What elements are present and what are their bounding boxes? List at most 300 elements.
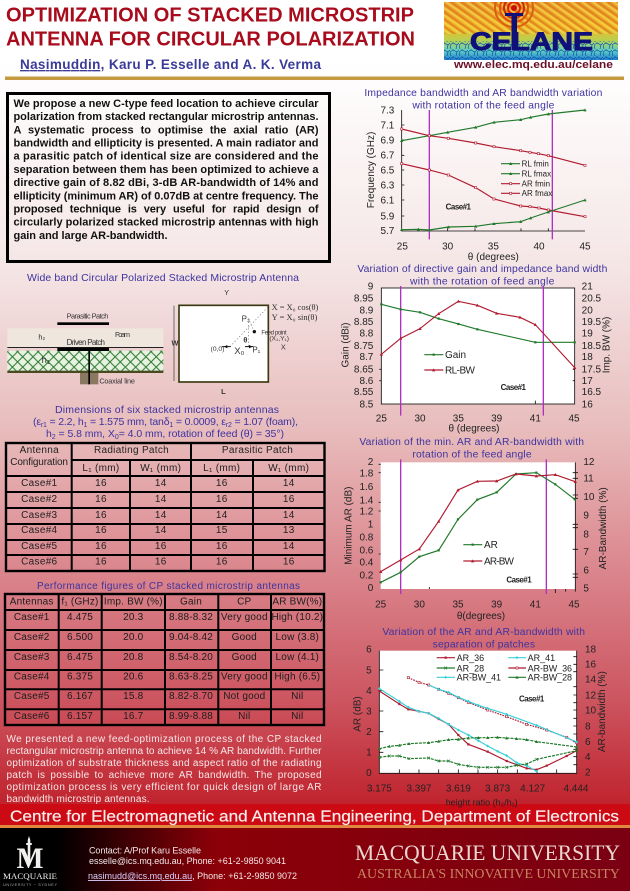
chart 1 plot: 30 (442, 241, 454, 252)
table caption: dimensions (33, 404, 298, 441)
CELANE logo: CELANE (470, 28, 593, 56)
university name (355, 840, 620, 881)
table: antenna dimensions: 14 (155, 494, 167, 505)
chart 2 plot: 20 (582, 305, 593, 316)
chart 2 plot: 39 (491, 414, 503, 425)
chart 2 plot: 25 (376, 414, 387, 425)
chart 2 title (357, 264, 608, 287)
table: antenna dimensions: 14 (216, 510, 228, 521)
table: antenna dimensions: Configuration (10, 457, 68, 468)
table: antenna dimensions: 16 (95, 525, 107, 536)
chart 2 plot: Gain (445, 350, 466, 361)
chart 4 plot: 5 (366, 665, 372, 676)
chart 4 title (382, 627, 585, 650)
chart 4 plot: 0 (366, 768, 372, 779)
diagram: stacked patch cross-section: h₁ (42, 355, 50, 365)
chart 3 plot: 0.8 (359, 533, 374, 544)
university name: MACQUARIE UNIVERSITY (355, 840, 620, 865)
chart 4 plot: 4.444 (563, 783, 589, 794)
diagram: patch top view: X (281, 342, 286, 351)
footer band (0, 828, 630, 891)
chart 2 plot: 30 (414, 414, 426, 425)
table caption: dimensions: 2 (52, 434, 56, 441)
diagram: stacked patch cross-section: h₂ (38, 333, 45, 342)
title: ANTENNA FOR CIRCULAR POLARIZATION (6, 28, 415, 50)
abstract text: A systematic process to optimise the axial ratio (AR) (14, 124, 319, 136)
chart 1 title: with rotation of the feed angle (411, 100, 555, 111)
diagram: patch top view: W (172, 338, 179, 347)
chart 2 plot: 41 (530, 414, 541, 425)
conclusion text: patch is possible to achieve more AR bandwidth. The proposed (6, 770, 322, 781)
diagram: stacked patch cross-section: Coaxial line (99, 376, 135, 385)
table: antenna dimensions: 16 (95, 478, 107, 489)
chart 1 plot: 45 (579, 241, 591, 252)
contact details: esselle@ics.mq.edu.au, Phone: +61-2-9850 9041 (89, 856, 286, 866)
chart 3 plot: θ(degrees) (457, 611, 505, 622)
table caption: dimensions: 0 (115, 434, 119, 441)
table caption: dimensions: h (46, 428, 52, 440)
diagram: patch top view: Y (224, 288, 229, 297)
table: performance figures: Not good (223, 691, 265, 702)
chart 2 plot: 21 (582, 281, 593, 292)
conclusion text: optimization of substrate thickness and aspect ratio of the radiating (6, 758, 322, 769)
abstract text: a parasitic patch of identical size are considered and the (14, 150, 318, 162)
table: antenna dimensions: Radiating Patch (94, 445, 169, 456)
abstract text: polarization from stacked rectangular microstrip antennas. (14, 111, 318, 123)
panel: abstract (8, 94, 330, 262)
table caption: dimensions: Dimensions of six stacked microstrip antennas (55, 404, 279, 416)
diagram: patch top view: θ (243, 335, 247, 344)
chart 2 plot: 17.5 (582, 365, 602, 376)
chart 3 plot: 1.6 (359, 482, 374, 493)
chart 4 plot: AR-BW_36 (528, 663, 572, 673)
chart 4 plot: AR_36 (457, 653, 484, 663)
table: performance figures: 6.475 (67, 652, 93, 663)
table: antenna dimensions: Case#5 (21, 541, 58, 552)
table caption: dimensions: 1 (169, 422, 173, 429)
conclusion text: We presented a new feed-optimization process of the CP stacked (6, 734, 322, 745)
chart 3 plot: 35 (452, 599, 464, 610)
chart 3 plot: 12 (583, 457, 595, 468)
diagram: stacked patch cross-section (7, 311, 163, 385)
chart 2 plot: 35 (453, 414, 464, 425)
table caption: dimensions: = 2.2, h (47, 416, 84, 428)
chart 4 plot: 2 (585, 768, 591, 779)
chart 3 plot: 7 (583, 547, 589, 558)
chart 4 plot: 18 (585, 645, 597, 656)
table: antenna dimensions: Case#2 (21, 494, 58, 505)
contact details: Contact: A/Prof Karu Esselle (89, 846, 201, 856)
abstract text: separation between them has been optimized to achieve a (14, 164, 319, 176)
table: antenna dimensions: 14 (155, 478, 167, 489)
table: performance figures: 8.99-8.88 (169, 711, 213, 722)
table: performance figures: Antennas (10, 596, 54, 608)
chart 3 plot: Minimum AR (dB) (344, 487, 355, 565)
table caption: dimensions: r2 (226, 422, 232, 429)
chart 2 plot: 8.7 (359, 352, 374, 363)
table: performance figures: f₁ (GHz) (61, 596, 99, 608)
table: performance figures: Low (3.8) (276, 632, 319, 643)
table: antenna dimensions: L₁ (mm) (203, 463, 240, 474)
chart 4 plot: 4.127 (520, 783, 546, 794)
table: antenna dimensions: 14 (155, 510, 167, 521)
diagram: stacked patch cross-section: Parasitic Patch (67, 311, 108, 320)
chart 4 plot: 10 (585, 705, 597, 716)
table caption: dimensions: 1 (84, 422, 88, 429)
chart 4 plot: 6 (366, 645, 372, 656)
table: performance figures: Case#6 (14, 711, 50, 722)
table caption: dimensions: (ε (33, 416, 41, 428)
chart 1 plot: 6.7 (380, 151, 395, 162)
chart 1 plot: 7.1 (380, 120, 395, 131)
chart 2 plot: RL-BW (445, 365, 476, 376)
chart 3 plot: AR-BW (484, 556, 515, 567)
table: performance figures: Imp. BW (%) (104, 596, 163, 608)
abstract text (14, 98, 319, 242)
chart 4 plot: 8 (585, 721, 591, 732)
table: performance figures: Case#4 (14, 672, 50, 682)
table: performance figures: Case#2 (14, 632, 50, 643)
chart 3 plot: 41 (530, 599, 541, 610)
diagram: patch top view: P₂ (242, 315, 250, 324)
table: performance figures: Low (4.1) (276, 652, 319, 663)
chart 1 plot: 6.9 (380, 135, 395, 146)
table: antenna dimensions: 14 (283, 510, 295, 521)
chart 3 plot: 5 (583, 584, 589, 595)
chart 3 plot: 2 (368, 457, 374, 468)
chart 2 title: with the rotation of feed angle (409, 276, 555, 287)
chart 2 plot: 45 (568, 414, 580, 425)
chart 1: impedance and AR bandwidth (364, 88, 603, 263)
title (6, 4, 415, 50)
table caption: dimensions: = 0.0009, ε (173, 416, 226, 428)
chart 4 plot (353, 645, 608, 807)
chart 4 plot: 4 (366, 686, 372, 697)
chart 2 plot: 8.9 (359, 305, 374, 316)
diagram: stacked patch cross-section: Driven Patch (67, 338, 105, 347)
chart 1 plot: 35 (488, 241, 499, 252)
contact details (88, 846, 297, 881)
diagram: patch top view: (X₁,Y₁) (269, 335, 289, 342)
table: antenna dimensions: W₁ (mm) (268, 463, 309, 474)
chart 4 plot: 6 (585, 737, 591, 748)
chart 4 plot: 3.175 (367, 783, 392, 794)
conclusion text: bandwidth microstrip antennas. (6, 794, 150, 805)
chart 2 plot: 18 (582, 352, 593, 363)
table: antenna dimensions: Antenna (20, 445, 59, 456)
table: antenna dimensions: 16 (95, 541, 107, 552)
table caption: dimensions: = 1.575 mm, tanδ (87, 416, 170, 428)
chart 3 plot: 0.4 (359, 558, 374, 569)
chart 1 plot: 7.3 (380, 105, 395, 116)
table: performance figures: 6.167 (67, 691, 93, 702)
table: performance figures: Case#1 (14, 612, 50, 623)
title: OPTIMIZATION OF STACKED MICROSTRIP (6, 4, 414, 26)
conclusion text: rectangular microstrip antenna to achieve 14 % AR bandwidth. Further (6, 746, 322, 757)
table: performance figures: Very good (221, 672, 268, 682)
table: performance figures: Gain (180, 596, 202, 608)
chart 3 plot (344, 457, 609, 622)
table: performance figures: Nil (291, 691, 303, 702)
chart 3 plot: 11 (583, 474, 594, 485)
table: antenna dimensions: 14 (283, 541, 295, 552)
chart 4 title: Variation of the AR and AR-bandwidth with (382, 627, 585, 638)
table: antenna dimensions: 16 (216, 556, 228, 568)
table: performance figures: Nil (238, 711, 250, 722)
chart 2 title: Variation of directive gain and impedance band width (357, 264, 608, 275)
table: performance figures: 20.8 (123, 652, 144, 663)
table: antenna dimensions: L₁ (mm) (82, 463, 120, 474)
chart 2 plot: Imp. BW (%) (601, 317, 612, 373)
table caption: dimensions: r1 (41, 422, 47, 429)
chart 2 plot: 8.55 (354, 387, 374, 398)
table: antenna dimensions: 16 (155, 556, 167, 568)
chart 2 plot: 8.95 (354, 294, 374, 305)
table: performance figures: 6.157 (67, 711, 93, 722)
table: antenna dimensions: 16 (283, 494, 295, 505)
chart 4 plot: AR-BW_41 (457, 673, 501, 683)
icon: Macquarie University logo: M (16, 842, 44, 875)
abstract text: We propose a new C-type feed location to achieve circular (14, 98, 319, 110)
chart 3: minimum AR and AR bandwidth (344, 437, 609, 622)
antenna diagram heading: Wide band Circular Polarized Stacked Microstrip Antenna (27, 272, 299, 284)
chart 4 plot: 3 (366, 706, 372, 717)
table: antenna dimensions: 14 (283, 478, 295, 489)
university name: AUSTRALIA'S INNOVATIVE UNIVERSITY (357, 866, 620, 881)
icon: Macquarie University logo: UNIVERSITY ~ SYDNEY (3, 883, 57, 887)
diagram: patch top view: X₀ (234, 346, 245, 356)
chart 2 plot: 19.5 (582, 317, 602, 328)
chart 4 plot: 3.397 (406, 783, 432, 794)
chart 1 plot: AR fmax (522, 189, 552, 198)
authors: Nasimuddin, Karu P. Esselle and A. K. Verma (20, 57, 321, 72)
conclusion text: optimization process is very efficient for quick design of large AR (6, 782, 322, 793)
chart 1 plot (366, 105, 591, 263)
table: performance figures (5, 594, 324, 725)
chart 3 plot: AR (484, 540, 498, 551)
table: performance figures: 20.3 (123, 612, 144, 623)
chart 2 plot: 19 (582, 329, 593, 340)
table: performance figures: 16.7 (123, 711, 144, 722)
chart 3 plot: 6 (583, 565, 589, 576)
contact details: nasimudd@ics.mq.edu.au, Phone: +61-2-9850 9072 (88, 871, 297, 881)
chart 2 plot: Case#1 (501, 383, 527, 392)
table: performance figures: 15.8 (123, 691, 144, 702)
chart 3 plot: Case#1 (506, 575, 532, 584)
diagram: patch top view: P₁ (252, 346, 261, 355)
chart 3 plot: 25 (375, 599, 387, 610)
table caption: dimensions: = 5.8 mm, X (56, 428, 115, 440)
diagram: patch top view: L (221, 387, 226, 396)
chart 2 plot: 20.5 (582, 294, 602, 305)
table: antenna dimensions: Parasitic Patch (222, 445, 293, 456)
banner: centre name (0, 804, 630, 828)
table: performance figures: 20.6 (123, 672, 144, 682)
table: performance figures: 20.0 (123, 632, 144, 643)
table: performance figures: High (10.2) (271, 612, 323, 623)
table: antenna dimensions: 15 (216, 525, 228, 536)
table: performance figures: 8.82-8.70 (169, 691, 213, 702)
table: performance figures: High (6.5) (274, 672, 320, 682)
diagram: patch top view: X = X₀ cos(θ) (272, 303, 319, 312)
table caption: dimensions: = 1.07 (foam), (232, 416, 298, 428)
chart 4 plot: 14 (585, 675, 597, 686)
chart 2 plot: θ (degrees) (448, 424, 500, 435)
chart 1 plot: RL fmin (522, 159, 549, 168)
chart 4 plot: AR_41 (528, 653, 555, 663)
table: antenna dimensions: Case#3 (21, 510, 58, 521)
chart 2 plot: 9 (368, 281, 374, 292)
chart 1 plot: 40 (533, 241, 545, 252)
table: performance figures: 6.375 (67, 672, 93, 682)
chart 3 title: Variation of the min. AR and AR-bandwidth with (359, 437, 584, 448)
chart 3 plot: 1.2 (359, 506, 374, 517)
chart 2 plot: 8.5 (359, 399, 374, 410)
website url: www.elec.mq.edu.au/celane (453, 59, 613, 71)
chart 2 plot: Gain (dBi) (340, 323, 351, 367)
chart 2 plot: 18.5 (582, 341, 602, 352)
chart 1 plot: 6.5 (380, 165, 395, 176)
chart 3 plot: 8 (583, 529, 589, 540)
chart 2 plot: 8.6 (359, 376, 374, 387)
chart 1 title: Impedance bandwidth and AR bandwidth variation (364, 88, 603, 99)
chart 1 plot: 5.9 (380, 211, 395, 222)
chart 3 plot: AR-Bandwidth (%) (598, 487, 609, 569)
diagram: patch top view: Y = X₀ sin(θ) (272, 313, 318, 322)
chart 4 title: separation of patches (433, 639, 535, 650)
chart 3 plot: 10 (583, 492, 595, 503)
chart 1 plot: θ (degrees) (468, 252, 519, 263)
chart 3 plot: 39 (491, 599, 503, 610)
diagram: stacked patch cross-section: Foam (115, 330, 130, 339)
chart 1 plot: AR fmin (522, 179, 550, 188)
chart 1 plot: 25 (397, 241, 408, 252)
chart 4 plot: Case#1 (519, 695, 545, 704)
chart 4 plot: 16 (585, 660, 597, 671)
table: performance figures: Good (232, 632, 257, 643)
chart 4 plot: 3.873 (485, 783, 511, 794)
table: antenna dimensions: 13 (283, 525, 295, 536)
table: antenna dimensions: Case#1 (21, 478, 58, 489)
chart 4 plot: 1 (366, 748, 372, 759)
table: antenna dimensions: 16 (216, 541, 228, 552)
table: performance figures: Case#3 (14, 652, 50, 663)
header rule (5, 76, 624, 80)
chart 4 plot: 4 (585, 752, 591, 763)
chart 2 plot: 8.65 (354, 365, 374, 376)
chart 4 plot: AR (dB) (353, 696, 364, 732)
table: performance figures: 8.54-8.20 (169, 652, 213, 663)
table: performance figures: Good (232, 652, 257, 663)
chart 3 plot: 0.2 (359, 570, 374, 581)
table: antenna dimensions (6, 443, 324, 571)
table: antenna dimensions: 16 (95, 556, 107, 568)
chart 4 plot: AR_28 (457, 663, 484, 673)
table: performance figures: AR BW(%) (272, 596, 322, 608)
chart 3 plot: 1.4 (359, 495, 374, 506)
diagram: patch top view: (0,0) (211, 346, 224, 353)
chart 1 plot: Frequency (GHz) (366, 132, 377, 208)
table: performance figures: CP (237, 596, 252, 608)
table: performance figures: 9.04-8.42 (169, 632, 213, 643)
chart 1 plot: 5.7 (380, 226, 395, 237)
table: performance figures: Nil (291, 711, 303, 722)
table: antenna dimensions: 16 (95, 494, 107, 505)
table: antenna dimensions: Case#4 (21, 525, 58, 536)
CELANE logo (444, 0, 618, 60)
chart 3 plot: 0.6 (359, 545, 374, 556)
table: performance figures: 8.63-8.25 (169, 672, 213, 682)
abstract text: bandwidth and ellipticity is presented. A main radiator and (14, 138, 318, 150)
table: antenna dimensions: 16 (216, 494, 228, 505)
chart 2 plot: 17 (582, 376, 593, 387)
chart 3 plot: 1 (368, 520, 374, 531)
chart 2 plot: 8.75 (354, 341, 374, 352)
chart 2 plot: 16.5 (582, 387, 602, 398)
antenna diagrams (7, 288, 319, 396)
chart 1 plot: 6.1 (380, 195, 395, 206)
abstract text: gain and large AR-bandwidth. (14, 230, 168, 242)
chart 3 plot: 0 (368, 583, 374, 594)
abstract text: circularly polarized stacked microstrip antennas with high (14, 216, 319, 228)
table: performance figures: Very good (221, 612, 268, 623)
chart 4: AR and AR bandwidth vs patch separation (353, 627, 608, 807)
chart 2: directive gain and impedance bandwidth (340, 264, 612, 435)
chart 4 plot: height ratio (h₂/h₁) (446, 797, 518, 807)
table: performance figures: Case#5 (14, 691, 50, 702)
table: antenna dimensions: 16 (155, 541, 167, 552)
table: antenna dimensions: 16 (283, 556, 295, 568)
chart 3 plot: 9 (583, 510, 589, 521)
chart 2 plot (340, 281, 612, 435)
table: antenna dimensions: Case#6 (21, 556, 58, 568)
chart 1 plot: 6.3 (380, 180, 395, 191)
diagram: patch top view: Feed point (261, 330, 287, 336)
chart 3 plot: 1.8 (359, 469, 374, 480)
abstract text: ellipticity (minimum AR) of 0.07dB at centre frequency. The (14, 190, 318, 202)
chart 3 title: rotation of the feed angle (412, 449, 532, 460)
abstract text: proposed technique is very useful for rapid design of (14, 204, 319, 216)
chart 3 plot: 30 (414, 599, 425, 610)
table caption: performance: Performance figures of CP stacked microstrip antennas (37, 581, 300, 592)
abstract text: directive gain of 8.82 dBi, 3-dB AR-bandwidth of 14% and (14, 177, 318, 189)
chart 3 title (359, 437, 584, 460)
conclusion text (6, 734, 322, 805)
chart 1 plot: Case#1 (446, 203, 472, 212)
chart 3 plot: 45 (568, 599, 580, 610)
chart 4 plot: AR-bandwidth (%) (597, 671, 608, 752)
chart 2 plot: 8.85 (354, 317, 374, 328)
icon: Macquarie University logo: MACQUARIE (3, 871, 57, 881)
table: performance figures: 6.500 (67, 632, 93, 643)
table: performance figures: 8.88-8.32 (169, 612, 213, 623)
table: antenna dimensions: 16 (216, 478, 228, 489)
table: antenna dimensions: 14 (155, 525, 167, 536)
chart 2 plot: 8.8 (359, 329, 374, 340)
table: antenna dimensions: W₁ (mm) (140, 463, 181, 474)
diagram: patch top view (172, 288, 319, 396)
icon: Macquarie University logo (3, 836, 57, 887)
chart 1 plot: RL fmax (522, 169, 551, 178)
chart 1 title (364, 88, 603, 111)
chart 4 plot: 12 (585, 690, 597, 701)
chart 2 plot: 16 (582, 399, 593, 410)
chart 4 plot: 3.619 (446, 783, 471, 794)
banner: centre name: Centre for Electromagnetic and Antenna Engineering, Department of Electronics (10, 808, 619, 826)
table: antenna dimensions: 16 (95, 510, 107, 521)
table caption: dimensions: = 4.0 mm, rotation of feed (θ) = 35°) (119, 428, 284, 440)
table: performance figures: 4.475 (67, 612, 93, 623)
